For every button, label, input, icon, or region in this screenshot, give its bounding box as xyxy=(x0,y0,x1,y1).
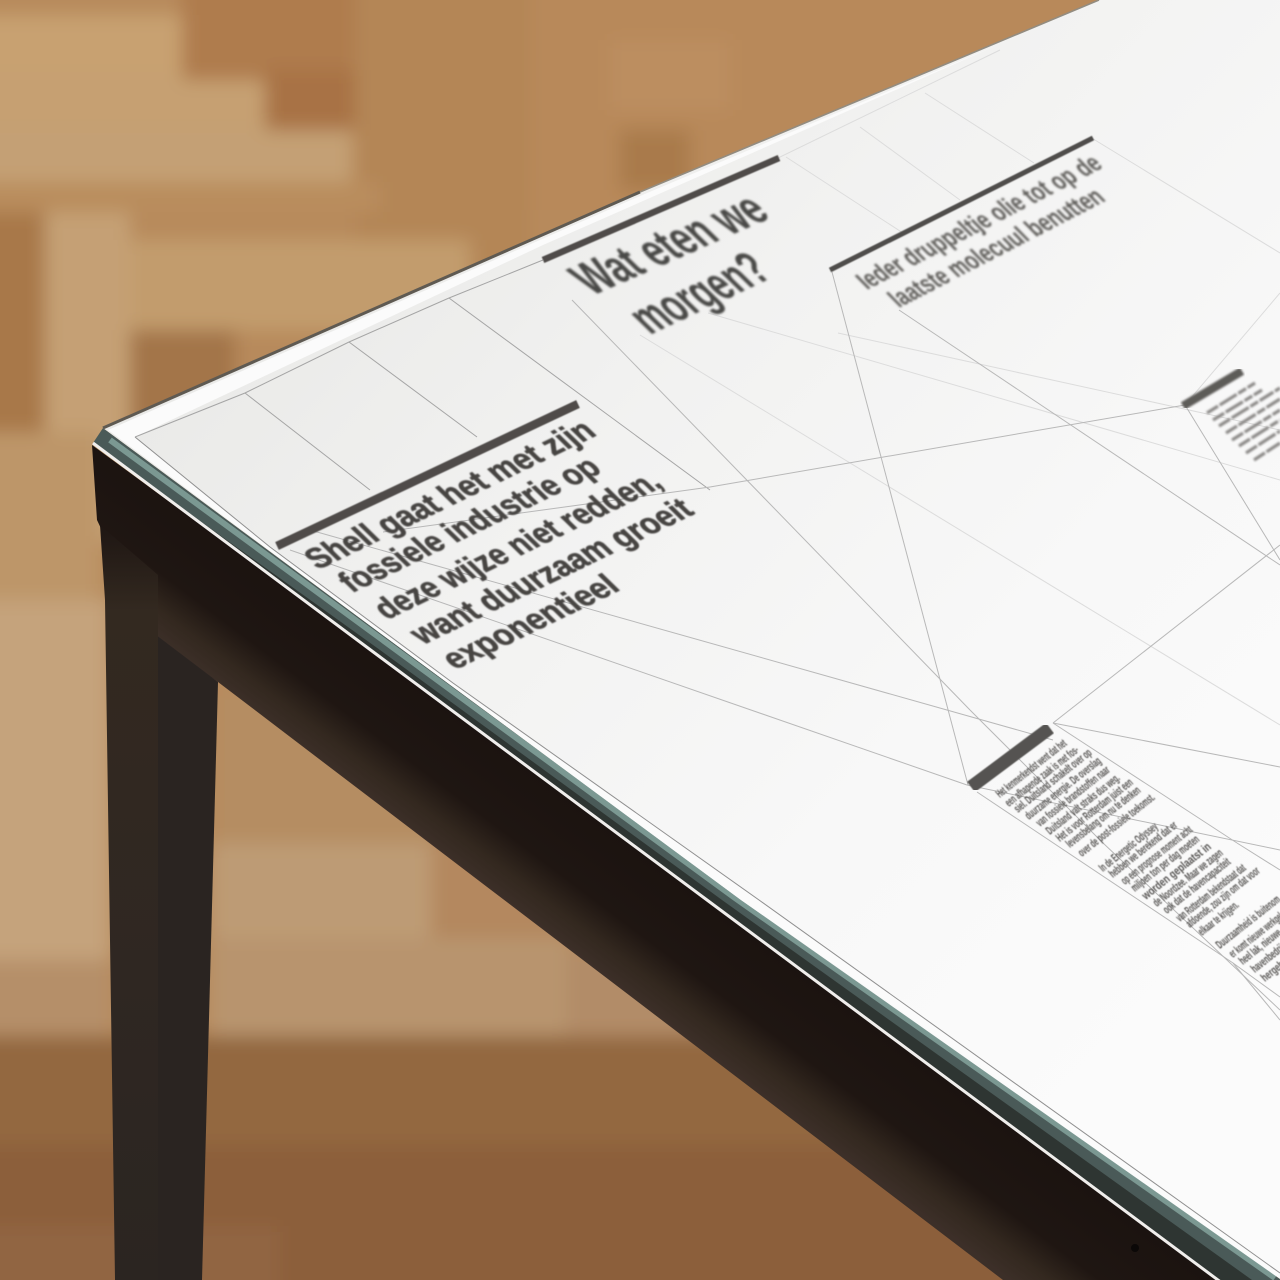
article column text: siel. Duitsland schakelt over op xyxy=(1011,746,1095,815)
article column text: Het is voor Rotterdam juist een xyxy=(1053,775,1136,844)
bar: article column rule xyxy=(971,728,1050,787)
article column text: In de Energetic Odyssey xyxy=(1096,820,1161,874)
article column text: van fossiele brandstoffen naar xyxy=(1033,763,1113,829)
article column text: hebben we berekend dat er xyxy=(1106,818,1180,880)
article column text: over de post-fossiele toekomst. xyxy=(1075,790,1158,859)
article column text: elkaar te krijgen. xyxy=(1195,898,1242,938)
article column text: Het kenmerkendst went dat het xyxy=(993,736,1069,800)
article column text xyxy=(993,736,1280,984)
article column text: worden geplaatst in xyxy=(1138,840,1214,903)
bar: food heading rule xyxy=(543,158,779,260)
heading: Shell xyxy=(296,414,701,676)
article column text: miljoen ton per dag moeten xyxy=(1128,832,1202,894)
article column text: duurzame energie. De overslag xyxy=(1022,754,1104,822)
heading: Shell: exponentieel xyxy=(433,569,627,676)
heading: Wat eten we morgen: Wat eten we xyxy=(557,184,781,304)
heading: Wat eten we morgen xyxy=(557,184,783,343)
heading: Shell: deze wijze niet redden, xyxy=(365,465,670,626)
heading: Shell: Shell gaat het met zijn xyxy=(296,414,604,576)
table leg xyxy=(100,525,218,1280)
heading: Shell: fossiele industrie op xyxy=(330,451,609,599)
table apron xyxy=(92,445,1230,1280)
illegible upper column text, shown as blurred rows xyxy=(1207,383,1280,460)
bar: upper column rule xyxy=(1183,371,1242,406)
article column text: Duitsland valt straks dus weg. xyxy=(1043,771,1123,837)
article column text: een afhapende zaak is met fos- xyxy=(1002,743,1082,809)
heading: Wat eten we morgen: morgen? xyxy=(615,242,783,343)
bar: oil heading rule xyxy=(830,138,1093,270)
heading: Shell: want duurzaam groeit xyxy=(401,492,701,651)
article column text: op een prognose moment acht xyxy=(1118,823,1195,887)
heading: Ieder druppeltje olie: laatste molecuul benutten xyxy=(881,183,1111,312)
bar: Shell heading rule xyxy=(277,404,578,546)
glass edge xyxy=(93,428,1280,1280)
heading: Ieder druppeltje olie xyxy=(849,149,1111,312)
article column text: levensbelang om nu te denken xyxy=(1063,783,1143,850)
heading: Ieder druppeltje olie: Ieder druppeltje olie tot op de xyxy=(849,149,1108,294)
screw hole in table apron xyxy=(1131,1244,1139,1252)
